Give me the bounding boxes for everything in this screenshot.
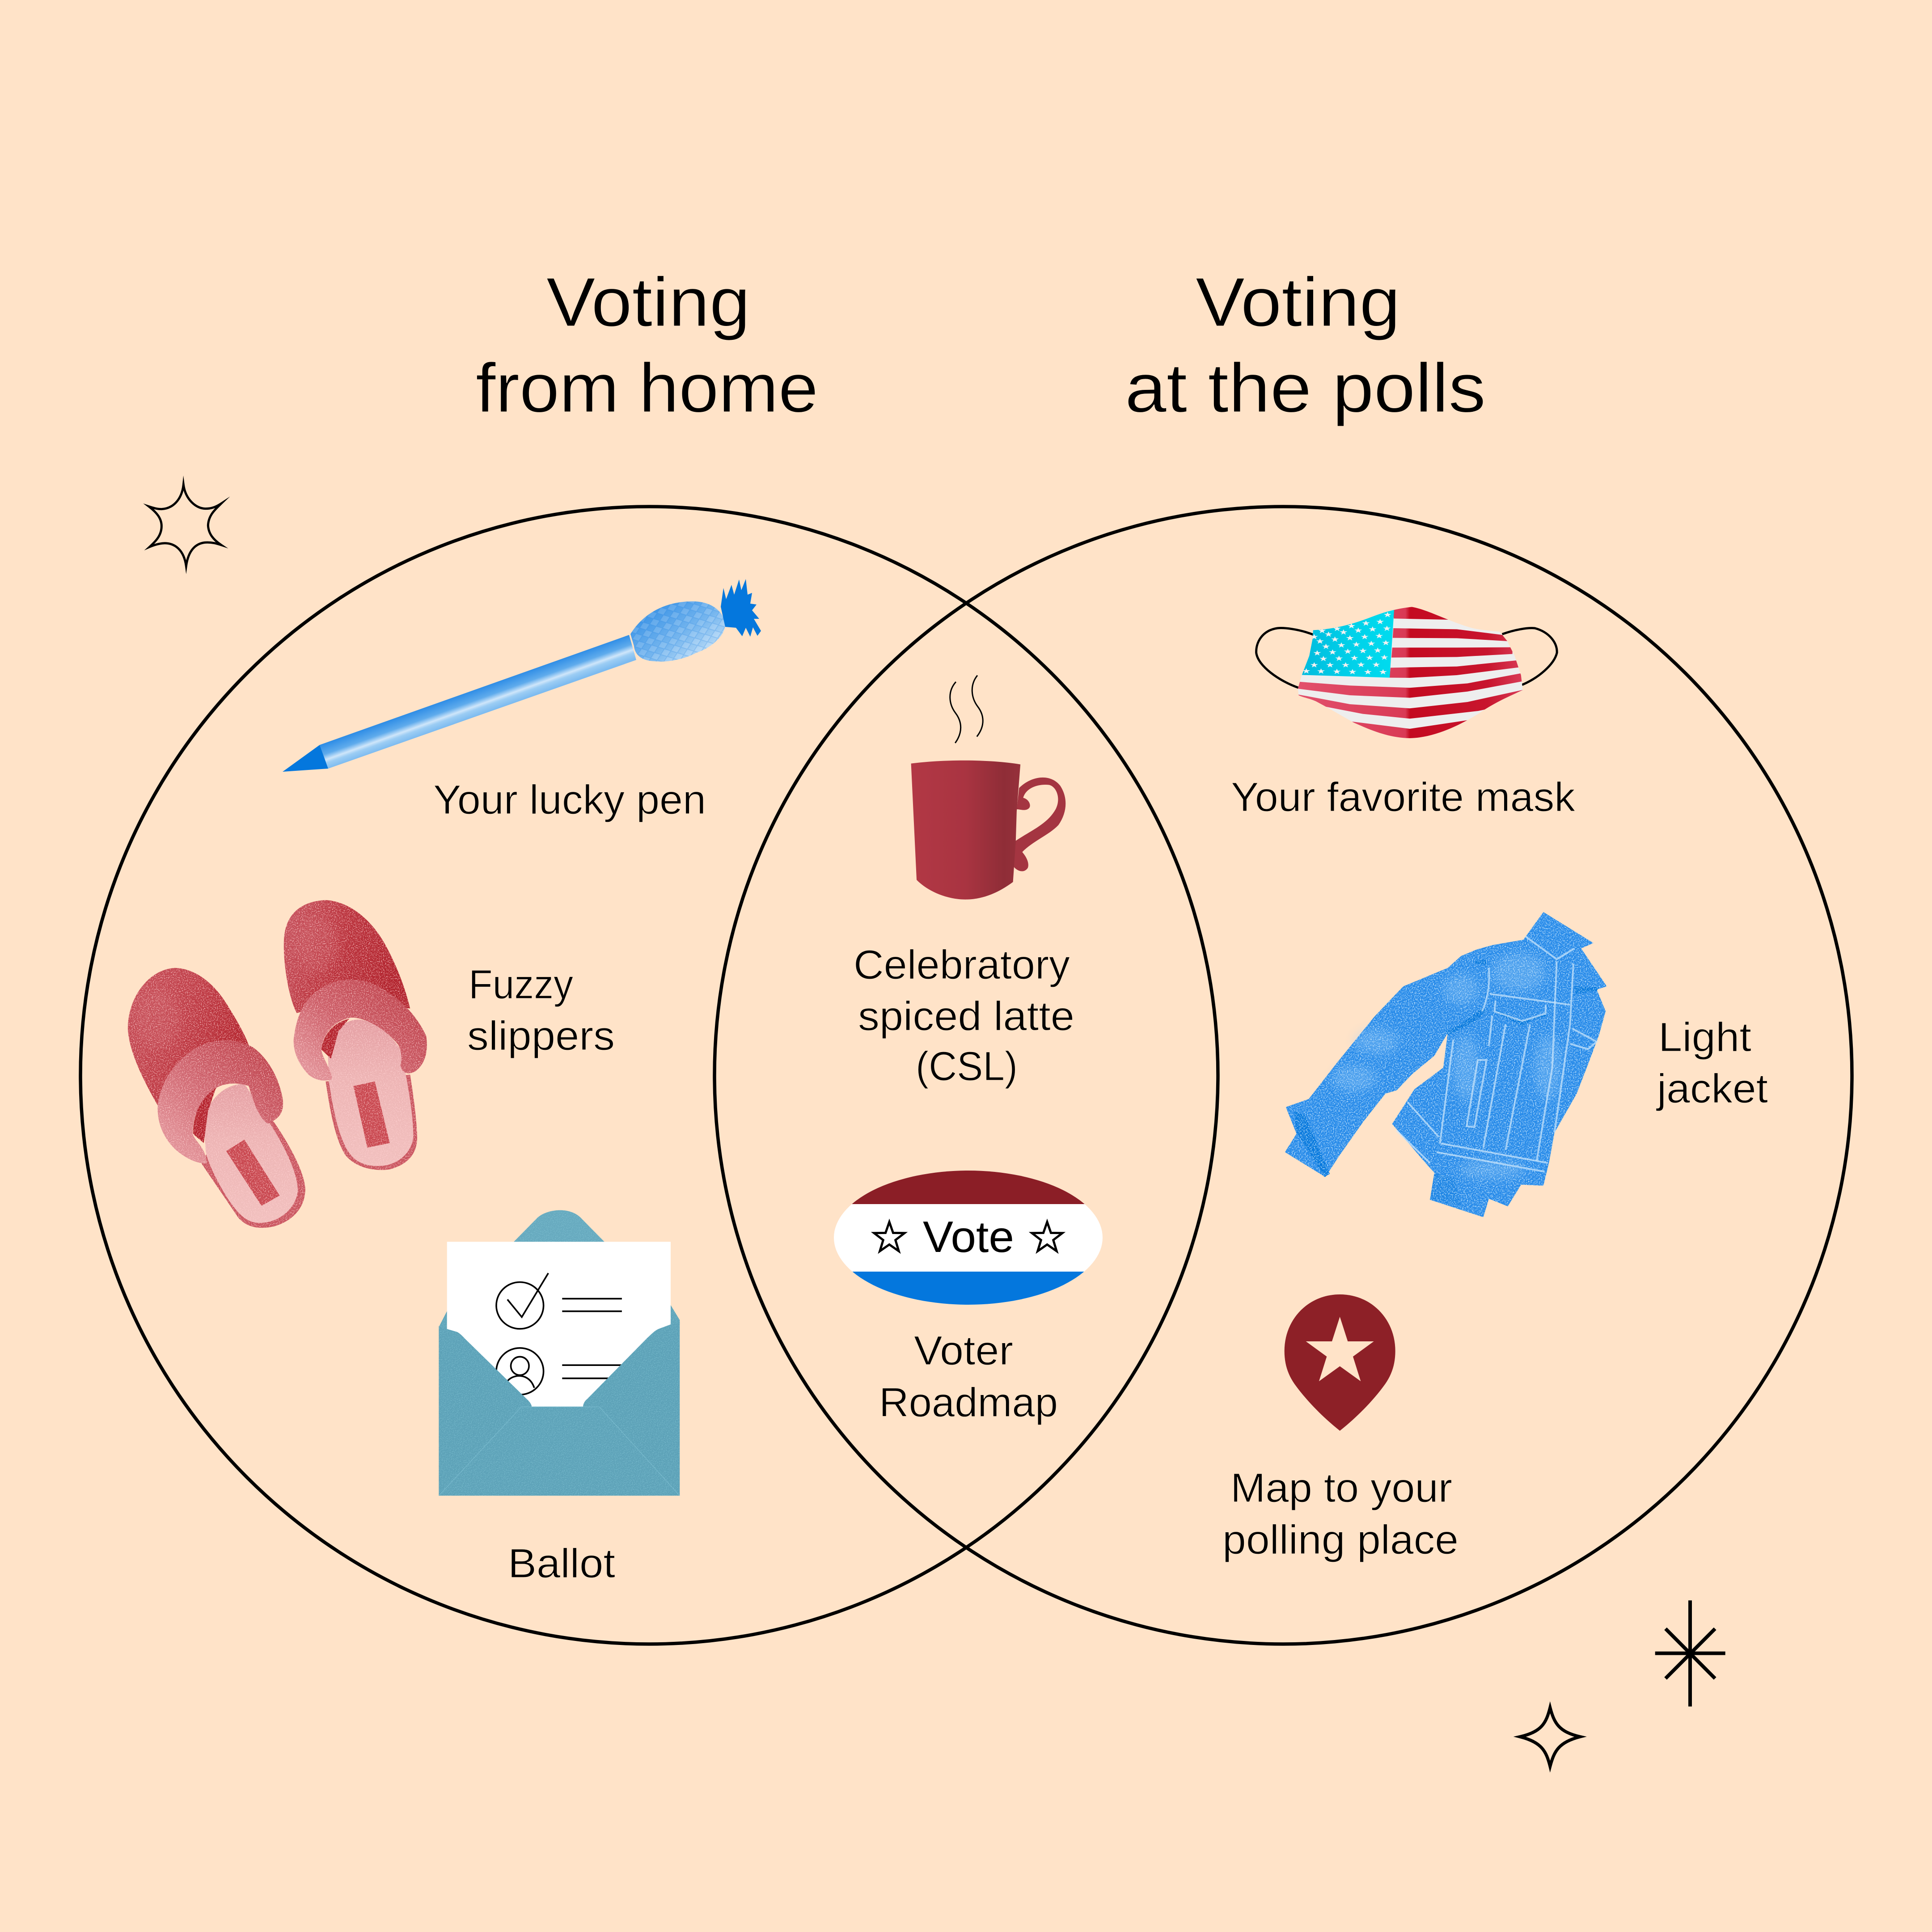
icon: red mug [911,761,1065,900]
label: voter roadmap [879,1328,1058,1425]
label: celebratory spiced latte: (CSL) [916,1044,1018,1089]
label: your lucky pen: Your lucky pen [433,777,706,823]
heading: voting at the polls [1125,263,1486,427]
icon: vote sticker [832,1169,1105,1306]
label: map to your polling place: Map to your [1230,1465,1452,1511]
ballot check mark row [496,1273,622,1395]
mask fabric [1294,605,1527,739]
label: fuzzy slippers: Fuzzy [469,962,573,1007]
icon: envelope with ballot [439,1210,680,1496]
icon: lucky pineapple pen [283,579,761,772]
label: your favorite mask: Your favorite mask [1231,774,1576,820]
label: voter roadmap: Voter [914,1328,1013,1374]
left slipper [128,968,249,1113]
icon: vote sticker: Vote [923,1212,1014,1261]
label: map to your polling place: polling place [1222,1517,1459,1563]
label: fuzzy slippers [467,962,615,1059]
venn diagram: two overlapping circles [80,507,1852,1644]
label: map to your polling place [1222,1465,1459,1563]
icon: american flag mask [1256,605,1557,739]
jacket silhouette [1285,912,1607,1217]
label: light jacket: jacket [1656,1066,1768,1112]
heading: voting from home [476,263,818,427]
icon: denim jacket [1285,912,1607,1217]
heading: voting at the polls: at the polls [1125,349,1486,427]
right slipper [284,900,410,1013]
envelope front flaps [439,1322,680,1496]
flag canton with stars [1302,610,1394,678]
heading: voting from home: from home [476,349,818,427]
icon: map pin with star [1285,1294,1395,1431]
label: celebratory spiced latte: Celebratory [854,942,1070,988]
label: light jacket: Light [1658,1015,1751,1060]
icon: four-point sparkle [1520,1708,1580,1767]
icon: six-point star outline [149,485,221,566]
icon: fuzzy slippers [128,900,427,1228]
heading: voting at the polls: Voting [1196,263,1400,341]
seams and pockets [1397,937,1597,1171]
ear loops [1256,628,1557,688]
label: celebratory spiced latte: spiced latte [858,993,1074,1039]
mottled highlights [1332,953,1561,1179]
icon: asterisk sparkle [1655,1600,1725,1707]
label: fuzzy slippers: slippers [467,1013,615,1059]
ballot paper [447,1242,671,1408]
dark folds [1446,1007,1485,1035]
label: celebratory spiced latte [854,942,1074,1089]
icon: steam [950,676,983,743]
heading: voting from home: Voting [546,263,750,341]
label: light jacket [1656,1015,1768,1112]
label: voter roadmap: Roadmap [879,1380,1058,1425]
label: ballot: Ballot [508,1541,615,1586]
